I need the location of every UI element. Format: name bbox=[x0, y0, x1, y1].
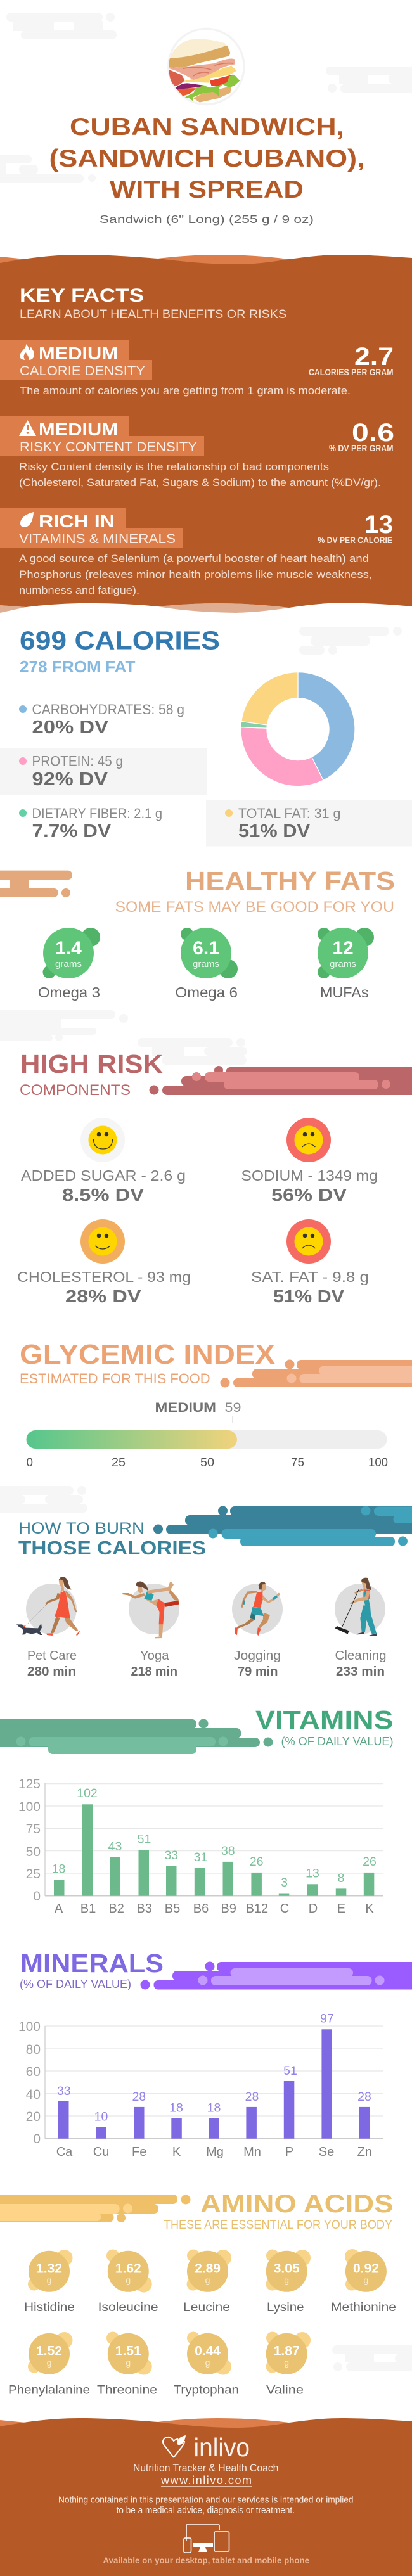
bar chart: vitamins: 51 bbox=[138, 1833, 151, 1847]
key facts subheading: LEARN ABOUT HEALTH BENEFITS OR RISKS bbox=[20, 307, 286, 321]
amino: phenylalanine: g bbox=[47, 2357, 51, 2368]
amino: tryptophan: g bbox=[205, 2357, 210, 2368]
amino: threonine: Threonine bbox=[97, 2383, 157, 2397]
logo: inlivo: inlivo bbox=[194, 2433, 250, 2462]
bar chart: vitamins: E bbox=[337, 1902, 345, 1916]
amino: lysine: g bbox=[284, 2275, 289, 2285]
bar chart: minerals: 18 bbox=[207, 2101, 221, 2115]
fat: omega 3: grams bbox=[55, 959, 82, 970]
amino: isoleucine: 1.62 bbox=[115, 2261, 141, 2276]
bar chart: vitamins bbox=[18, 1777, 383, 1916]
panel: footer bbox=[0, 2418, 412, 2576]
minerals subheading: (% OF DAILY VALUE) bbox=[20, 1978, 131, 1990]
minerals heading: MINERALS bbox=[20, 1949, 164, 1978]
bar chart: minerals: 40 bbox=[26, 2087, 41, 2102]
tagline: Nutrition Tracker & Health Coach bbox=[133, 2462, 278, 2474]
activity: cleaning bbox=[335, 1578, 387, 1679]
macro: carbohydrates bbox=[19, 702, 184, 738]
bar chart: vitamins: B1 bbox=[80, 1902, 96, 1916]
amino: histidine: g bbox=[47, 2275, 51, 2285]
bar chart: minerals: 80 bbox=[26, 2042, 41, 2057]
amino: histidine: Histidine bbox=[24, 2300, 75, 2314]
macro: total fat bbox=[206, 800, 412, 847]
disclaimer bbox=[58, 2495, 354, 2516]
bar chart: minerals: 60 bbox=[26, 2065, 41, 2079]
vitamins decoration bbox=[0, 1719, 273, 1754]
amino: leucine: g bbox=[205, 2275, 210, 2285]
macro: dietary fiber bbox=[19, 805, 162, 842]
icon: woman doing yoga bbox=[122, 1582, 179, 1638]
glycemic index gauge: MEDIUM bbox=[155, 1400, 216, 1415]
bar chart: vitamins: 102 bbox=[77, 1786, 98, 1800]
amino: methionine bbox=[331, 2249, 396, 2314]
bar chart: minerals: Se bbox=[319, 2145, 334, 2159]
glycemic index gauge: 75 bbox=[291, 1456, 304, 1470]
bar chart: vitamins: B2 bbox=[108, 1902, 124, 1916]
macro: protein: 92% DV bbox=[32, 769, 108, 790]
fat: omega 6: Omega 6 bbox=[175, 984, 238, 1001]
bar chart: vitamins: B5 bbox=[165, 1902, 180, 1916]
risky content density fact: % DV PER GRAM bbox=[329, 444, 393, 453]
fat: MUFAs: 12 bbox=[332, 938, 354, 959]
high risk decoration bbox=[150, 1066, 412, 1095]
risk: saturated fat: 51% DV bbox=[273, 1286, 344, 1306]
calorie density fact: MEDIUM bbox=[39, 343, 118, 363]
amino: valine: Valine bbox=[266, 2383, 304, 2397]
fat: omega 3: Omega 3 bbox=[38, 984, 100, 1001]
activity: yoga bbox=[122, 1582, 179, 1679]
bar chart: vitamins: 38 bbox=[221, 1844, 235, 1858]
risk: sodium bbox=[241, 1118, 378, 1205]
activity: jogging: Jogging bbox=[234, 1649, 281, 1663]
amino: tryptophan bbox=[174, 2332, 239, 2397]
risky content density fact: 0.6 bbox=[352, 419, 394, 447]
bar chart: vitamins: 26 bbox=[363, 1855, 377, 1869]
bar chart: minerals: Fe bbox=[132, 2145, 146, 2159]
bar chart: minerals: 10 bbox=[94, 2110, 108, 2124]
calorie density fact: 2.7 bbox=[354, 343, 394, 371]
bar chart: minerals: 28 bbox=[357, 2090, 371, 2104]
activity: jogging: 79 min bbox=[238, 1665, 278, 1679]
bar chart: vitamins: A bbox=[55, 1902, 63, 1916]
amino: lysine: 3.05 bbox=[274, 2261, 300, 2276]
macro: carbohydrates: CARBOHYDRATES: 58 g bbox=[32, 702, 184, 717]
macro: total fat: TOTAL FAT: 31 g bbox=[238, 805, 341, 821]
website: www.inlivo.com bbox=[160, 2474, 252, 2487]
icon: flame bbox=[20, 344, 34, 360]
serving size subtitle: Sandwich (6" Long) (255 g / 9 oz) bbox=[100, 213, 314, 226]
bar chart: vitamins: 33 bbox=[164, 1849, 178, 1862]
amino: phenylalanine bbox=[8, 2332, 90, 2397]
activity: pet care: 280 min bbox=[27, 1665, 76, 1679]
risky content density fact: RISKY CONTENT DENSITY bbox=[20, 440, 197, 454]
risk: added sugar: 8.5% DV bbox=[62, 1185, 144, 1205]
amino acids subheading: THESE ARE ESSENTIAL FOR YOUR BODY bbox=[164, 2218, 392, 2232]
key facts heading: KEY FACTS bbox=[20, 285, 144, 306]
fat: omega 3: 1.4 bbox=[55, 938, 82, 959]
fat: MUFAs bbox=[318, 928, 374, 1001]
bar chart: minerals bbox=[18, 2012, 383, 2159]
calorie density fact bbox=[0, 340, 394, 397]
rich in vitamins fact: numbness and fatigue). bbox=[19, 585, 139, 596]
healthy fats subheading: SOME FATS MAY BE GOOD FOR YOU bbox=[115, 899, 394, 916]
bar chart: minerals: 97 bbox=[320, 2012, 334, 2026]
amino: tryptophan: 0.44 bbox=[195, 2343, 221, 2359]
activity: pet care: Pet Care bbox=[27, 1649, 77, 1663]
amino: threonine: 1.51 bbox=[115, 2343, 141, 2359]
amino: isoleucine: Isoleucine bbox=[98, 2300, 158, 2314]
bar chart: vitamins: C bbox=[280, 1902, 289, 1916]
bar chart: minerals: 20 bbox=[26, 2110, 41, 2124]
risk: saturated fat: SAT. FAT - 9.8 g bbox=[251, 1269, 369, 1285]
rich in vitamins fact: Phosphorus (releaves minor health problems like muscle weakness, bbox=[19, 569, 372, 580]
vitamins subheading: (% OF DAILY VALUE) bbox=[281, 1735, 393, 1748]
fat: omega 6: 6.1 bbox=[193, 938, 219, 959]
icon: sad face bbox=[286, 1219, 331, 1264]
amino acids heading: AMINO ACIDS bbox=[200, 2190, 393, 2218]
burn calories heading bbox=[18, 1520, 206, 1559]
rich in vitamins fact: A good source of Selenium (a powerful booster of heart health) and bbox=[19, 553, 369, 565]
burn calories heading: THOSE CALORIES bbox=[18, 1537, 206, 1559]
amino: histidine bbox=[24, 2250, 75, 2314]
rich in vitamins fact: VITAMINS & MINERALS bbox=[19, 532, 176, 546]
amino: histidine: 1.32 bbox=[36, 2261, 62, 2276]
macro: total fat: 51% DV bbox=[238, 821, 311, 842]
panel: key facts bbox=[0, 255, 412, 613]
bar chart: minerals: Ca bbox=[56, 2145, 73, 2159]
food photo: sandwich bbox=[169, 29, 244, 105]
amino: valine bbox=[266, 2332, 311, 2397]
title: (SANDWICH CUBANO), bbox=[49, 145, 365, 172]
bar chart: vitamins: B12 bbox=[246, 1902, 268, 1916]
fat: MUFAs: grams bbox=[330, 959, 356, 970]
bar chart: minerals: Zn bbox=[357, 2145, 372, 2159]
amino: threonine bbox=[97, 2332, 157, 2397]
amino: leucine bbox=[183, 2250, 231, 2314]
risky content density fact bbox=[0, 416, 394, 489]
macro: dietary fiber: DIETARY FIBER: 2.1 g bbox=[32, 805, 162, 821]
calorie density fact: CALORIE DENSITY bbox=[20, 364, 145, 378]
activity: yoga: Yoga bbox=[140, 1649, 169, 1663]
high risk subheading: COMPONENTS bbox=[20, 1082, 131, 1099]
healthy fats heading: HEALTHY FATS bbox=[185, 866, 395, 895]
bar chart: vitamins: 75 bbox=[26, 1822, 41, 1836]
bar chart: minerals: Cu bbox=[93, 2145, 109, 2159]
bar chart: vitamins: B3 bbox=[136, 1902, 152, 1916]
bar chart: vitamins: 43 bbox=[108, 1840, 122, 1854]
risk: saturated fat bbox=[251, 1219, 369, 1306]
calorie density fact: CALORIES PER GRAM bbox=[309, 368, 393, 377]
bar chart: minerals: 51 bbox=[283, 2064, 297, 2078]
icon: woman walking dog bbox=[16, 1577, 80, 1636]
fat: omega 3 bbox=[38, 928, 100, 1001]
macro: carbohydrates: 20% DV bbox=[32, 717, 109, 738]
high risk heading: HIGH RISK bbox=[20, 1049, 163, 1079]
calories heading: 699 CALORIES bbox=[20, 626, 220, 655]
logo: inlivo bbox=[163, 2433, 250, 2462]
activity: cleaning: 233 min bbox=[336, 1665, 385, 1679]
fat: omega 6: grams bbox=[193, 959, 219, 970]
risky content density fact: MEDIUM bbox=[39, 420, 118, 439]
icon: warning triangle bbox=[19, 420, 36, 436]
amino: valine: 1.87 bbox=[274, 2343, 300, 2359]
bar chart: vitamins: B9 bbox=[221, 1902, 236, 1916]
glycemic index gauge: 59 bbox=[224, 1400, 241, 1415]
risk: sodium: 56% DV bbox=[271, 1185, 347, 1205]
icon: man jogging bbox=[235, 1582, 280, 1636]
risky content density fact: Risky Content density is the relationship of bad components bbox=[19, 461, 329, 473]
bar chart: vitamins: 8 bbox=[338, 1871, 344, 1885]
glycemic index gauge: 100 bbox=[368, 1456, 388, 1470]
glycemic index gauge: 50 bbox=[200, 1456, 214, 1470]
amino acids decoration bbox=[0, 2195, 190, 2222]
risk: added sugar bbox=[21, 1118, 186, 1205]
bar chart: minerals: K bbox=[172, 2145, 181, 2159]
macro: protein: PROTEIN: 45 g bbox=[32, 753, 123, 769]
amino: methionine: 0.92 bbox=[353, 2261, 379, 2276]
bar chart: minerals: Mg bbox=[206, 2145, 224, 2159]
title bbox=[49, 113, 365, 203]
bar chart: vitamins: 3 bbox=[281, 1876, 288, 1890]
glycemic decoration bbox=[221, 1360, 412, 1388]
bar chart: minerals: 33 bbox=[57, 2084, 71, 2098]
risky content density fact: (Cholesterol, Saturated Fat, Sugars & Sodium) to the amount (%DV/gr). bbox=[19, 477, 381, 489]
bar chart: vitamins: 100 bbox=[18, 1800, 41, 1814]
amino: methionine: Methionine bbox=[331, 2300, 396, 2314]
amino: lysine: Lysine bbox=[267, 2300, 304, 2314]
bar chart: minerals: P bbox=[285, 2145, 293, 2159]
bar chart: vitamins: 50 bbox=[26, 1845, 41, 1859]
amino: isoleucine bbox=[98, 2250, 158, 2314]
bar chart: vitamins: 125 bbox=[18, 1777, 41, 1791]
macro: protein bbox=[0, 748, 207, 795]
burn calories heading: HOW TO BURN bbox=[18, 1520, 145, 1537]
glycemic index heading: GLYCEMIC INDEX bbox=[20, 1339, 275, 1370]
disclaimer: Nothing contained in this presentation and our services is intended or implied bbox=[58, 2495, 354, 2505]
bar chart: minerals: 28 bbox=[132, 2090, 146, 2104]
amino: isoleucine: g bbox=[126, 2275, 131, 2285]
amino: phenylalanine: Phenylalanine bbox=[8, 2383, 90, 2397]
bar chart: vitamins: 0 bbox=[33, 1889, 41, 1904]
disclaimer: to be a medical advice, diagnosis or treatment. bbox=[117, 2506, 295, 2516]
amino: tryptophan: Tryptophan bbox=[174, 2383, 239, 2397]
amino: methionine: g bbox=[364, 2275, 368, 2285]
rich in vitamins fact bbox=[0, 508, 393, 596]
calorie density fact: The amount of calories you are getting from 1 gram is moderate. bbox=[20, 385, 351, 397]
rich in vitamins fact: 13 bbox=[364, 511, 393, 539]
bar chart: vitamins: 13 bbox=[306, 1867, 319, 1881]
amino: valine: g bbox=[284, 2357, 289, 2368]
bar chart: vitamins: 26 bbox=[250, 1855, 263, 1869]
glycemic index gauge bbox=[27, 1400, 388, 1470]
glycemic index subheading: ESTIMATED FOR THIS FOOD bbox=[20, 1371, 210, 1387]
risk: cholesterol: 28% DV bbox=[65, 1286, 141, 1306]
healthy fats decoration bbox=[0, 871, 72, 897]
icon: mild smile face bbox=[80, 1219, 125, 1264]
bar chart: minerals: 28 bbox=[245, 2090, 259, 2104]
bar chart: vitamins: 31 bbox=[194, 1850, 207, 1864]
amino: leucine: 2.89 bbox=[195, 2261, 221, 2276]
amino: phenylalanine: 1.52 bbox=[36, 2343, 62, 2359]
bar chart: minerals: Mn bbox=[243, 2145, 261, 2159]
title: WITH SPREAD bbox=[110, 176, 304, 203]
activity: jogging bbox=[232, 1582, 283, 1679]
title: CUBAN SANDWICH, bbox=[70, 113, 344, 141]
activity: yoga: 218 min bbox=[131, 1665, 177, 1679]
icon: happy face bbox=[80, 1118, 125, 1162]
donut chart: macronutrients bbox=[241, 672, 355, 786]
amino: threonine: g bbox=[126, 2357, 131, 2368]
risk: cholesterol: CHOLESTEROL - 93 mg bbox=[17, 1269, 191, 1285]
bar chart: minerals: 100 bbox=[18, 2020, 41, 2034]
burn calories decoration bbox=[153, 1506, 412, 1546]
availability note: Available on your desktop, tablet and mobile phone bbox=[103, 2555, 309, 2565]
bar chart: minerals: 18 bbox=[169, 2101, 183, 2115]
bar chart: vitamins: K bbox=[365, 1902, 374, 1916]
rich in vitamins fact: % DV PER CALORIE bbox=[318, 535, 392, 545]
bar chart: vitamins: D bbox=[309, 1902, 318, 1916]
risk: added sugar: ADDED SUGAR - 2.6 g bbox=[21, 1167, 186, 1184]
fat: omega 6 bbox=[175, 928, 238, 1001]
icon: sad face bbox=[286, 1118, 331, 1162]
bar chart: minerals: 0 bbox=[33, 2132, 41, 2146]
rich in vitamins fact: RICH IN bbox=[39, 511, 115, 531]
macro: dietary fiber: 7.7% DV bbox=[32, 821, 112, 842]
risk: cholesterol bbox=[17, 1219, 191, 1306]
icon: woman sweeping bbox=[335, 1578, 377, 1636]
bar chart: vitamins: B6 bbox=[193, 1902, 209, 1916]
icon: leaf bbox=[20, 512, 34, 527]
activity: cleaning: Cleaning bbox=[335, 1649, 387, 1663]
minerals decoration bbox=[141, 1962, 412, 1990]
activity: pet care bbox=[16, 1577, 80, 1679]
bar chart: vitamins: 25 bbox=[26, 1867, 41, 1881]
amino: leucine: Leucine bbox=[183, 2300, 230, 2314]
fat: MUFAs: MUFAs bbox=[320, 984, 369, 1001]
bar chart: vitamins: 18 bbox=[52, 1862, 65, 1876]
glycemic index gauge: 25 bbox=[112, 1456, 126, 1470]
icon: heart and leaf bbox=[163, 2435, 186, 2457]
amino: lysine bbox=[266, 2250, 311, 2314]
icon: devices bbox=[184, 2525, 229, 2553]
calories from fat: 278 FROM FAT bbox=[20, 657, 136, 676]
glycemic index gauge: 0 bbox=[27, 1456, 33, 1470]
risk: sodium: SODIUM - 1349 mg bbox=[241, 1167, 378, 1184]
vitamins heading: VITAMINS bbox=[255, 1705, 393, 1734]
